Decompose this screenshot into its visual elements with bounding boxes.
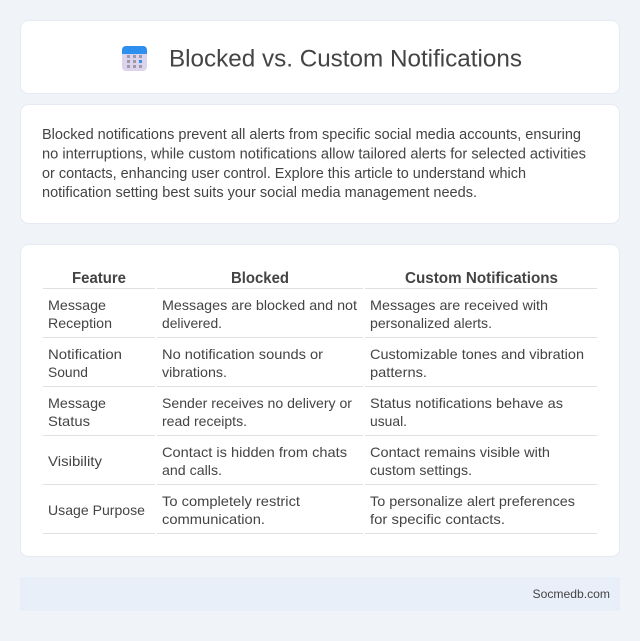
row: usage purpose: communication.	[162, 511, 265, 527]
intro text	[42, 127, 586, 201]
row: usage purpose: To completely restrict	[162, 493, 300, 509]
row: message status: Status	[48, 413, 90, 429]
row: message status: usual.	[370, 413, 407, 429]
row: visibility: Contact remains visible with	[370, 444, 550, 460]
panel: comparison table	[20, 244, 620, 556]
row: message reception: Messages are blocked and not	[162, 297, 357, 313]
row: visibility: custom settings.	[370, 462, 472, 478]
footer source text: Socmedb.com	[532, 587, 610, 601]
title: Blocked vs. Custom Notifications	[169, 46, 522, 72]
row: message status: read receipts.	[162, 413, 247, 429]
row: message reception: personalized alerts.	[370, 315, 492, 331]
row: message status: Message	[48, 395, 106, 411]
row: message reception	[48, 297, 548, 331]
row: notification sound: Customizable tones and vibration	[370, 346, 584, 362]
row: usage purpose: To personalize alert preferences	[370, 493, 575, 509]
row: message reception: delivered.	[162, 315, 222, 331]
row: notification sound: vibrations.	[162, 364, 227, 380]
row: usage purpose	[48, 493, 575, 527]
row: notification sound: Sound	[48, 364, 88, 380]
row: visibility: Visibility	[48, 453, 102, 469]
row: message reception: Reception	[48, 315, 112, 331]
panel: header	[20, 20, 620, 94]
row: notification sound: No notification sounds or	[162, 346, 323, 362]
panel: intro	[20, 104, 620, 224]
footer	[20, 577, 620, 611]
row: message reception: Messages are received with	[370, 297, 548, 313]
row: message status: Status notifications behave as	[370, 395, 563, 411]
row: notification sound: patterns.	[370, 364, 427, 380]
intro text: no interruptions, while custom notifications allow tailored alerts for selected activities	[42, 146, 586, 162]
table header row: Blocked	[231, 270, 289, 287]
table header row	[72, 270, 558, 287]
intro text: or contacts, enhancing user control. Explore this article to understand which	[42, 166, 526, 182]
row: message reception: Message	[48, 297, 106, 313]
table header row: Feature	[72, 270, 126, 287]
icon: calendar	[122, 46, 147, 71]
row: visibility: Contact is hidden from chats	[162, 444, 347, 460]
row: usage purpose: for specific contacts.	[370, 511, 505, 527]
row: notification sound: Notification	[48, 346, 122, 362]
row: notification sound	[48, 346, 584, 380]
row: usage purpose: Usage Purpose	[48, 502, 145, 518]
row: visibility: and calls.	[162, 462, 222, 478]
table header row: Custom Notifications	[405, 270, 558, 287]
row: message status: Sender receives no delivery or	[162, 395, 352, 411]
row: visibility	[48, 444, 550, 478]
row: message status	[48, 395, 563, 429]
intro text: Blocked notifications prevent all alerts from specific social media accounts, ensuring	[42, 127, 581, 143]
intro text: notification setting best suits your social media management needs.	[42, 185, 477, 201]
